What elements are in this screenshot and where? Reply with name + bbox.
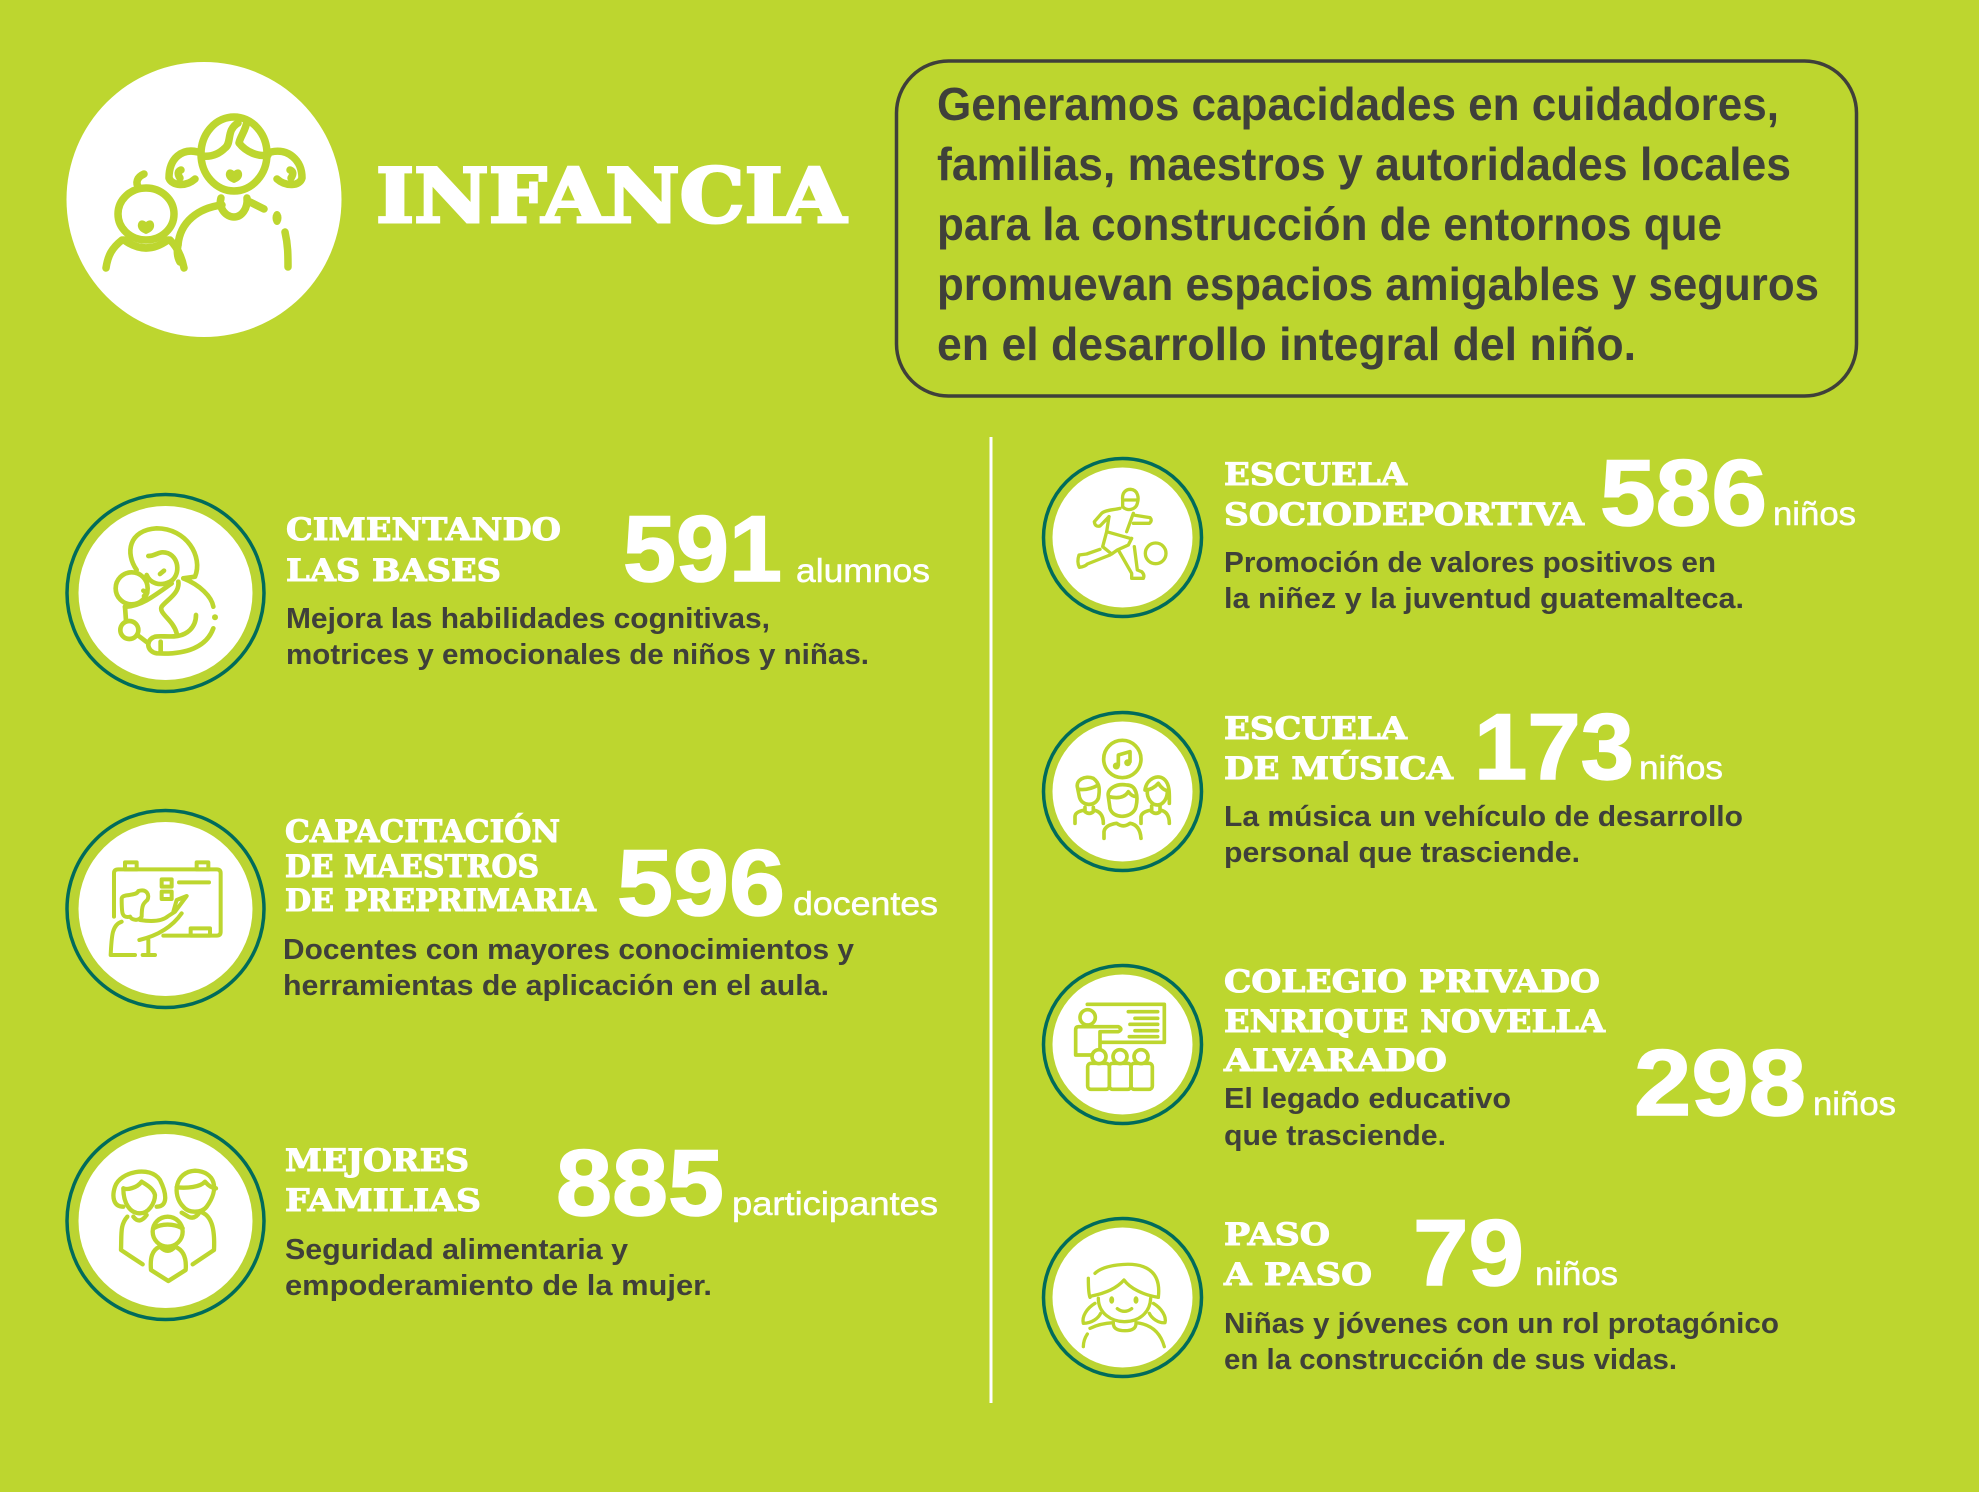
number: 885 participantes bbox=[556, 1130, 938, 1235]
description: Promoción de valores positivos en bbox=[1224, 547, 1716, 579]
callout: mission statement: familias, maestros y autoridades locales bbox=[937, 138, 1791, 190]
callout: mission statement: promuevan espacios amigables y seguros bbox=[937, 258, 1819, 310]
number: 298 niños: 298 bbox=[1634, 1030, 1806, 1135]
heading: FAMILIAS bbox=[285, 1183, 481, 1219]
description: motrices y emocionales de niños y niñas. bbox=[286, 639, 869, 671]
heading: MEJORES bbox=[285, 1143, 469, 1179]
number: 596 docentes: 596 bbox=[617, 830, 785, 935]
description: Mejora las habilidades cognitivas, bbox=[286, 603, 770, 635]
description: que trasciende. bbox=[1224, 1120, 1446, 1152]
number: 586 niños: 586 bbox=[1600, 440, 1767, 545]
column divider bbox=[990, 437, 992, 1403]
icon: children with music note bbox=[1044, 712, 1202, 870]
description bbox=[1224, 1308, 1779, 1376]
number: 591 alumnos bbox=[623, 496, 930, 601]
description bbox=[286, 603, 869, 671]
panel: mejores familias bbox=[67, 1122, 938, 1320]
callout: mission statement: para la construcción de entornos que bbox=[937, 198, 1722, 250]
heading: PASO bbox=[1224, 1217, 1330, 1253]
number: 885 participantes: 885 bbox=[556, 1130, 724, 1235]
heading bbox=[285, 1143, 481, 1219]
icon: girl with pigtails bbox=[1044, 1218, 1202, 1376]
heading bbox=[1223, 1217, 1372, 1293]
panel: colegio privado bbox=[1044, 964, 1896, 1152]
panel: escuela sociodeportiva bbox=[1044, 440, 1856, 616]
heading: LAS BASES bbox=[286, 553, 501, 589]
heading bbox=[285, 812, 597, 919]
heading: ESCUELA bbox=[1224, 711, 1408, 747]
number: 173 niños: niños bbox=[1639, 749, 1723, 786]
description: El legado educativo bbox=[1224, 1083, 1511, 1115]
icon: presenter and audience bbox=[1044, 966, 1202, 1124]
description bbox=[1224, 1083, 1511, 1152]
panel: cimentando las bases bbox=[67, 494, 930, 692]
number: 591 alumnos: 591 bbox=[623, 496, 782, 601]
description bbox=[1224, 547, 1744, 615]
number: 298 niños: niños bbox=[1813, 1085, 1896, 1122]
callout: mission statement: Generamos capacidades en cuidadores, bbox=[937, 78, 1779, 130]
heading: A PASO bbox=[1223, 1257, 1372, 1293]
panel: paso a paso bbox=[1044, 1200, 1779, 1376]
description: La música un vehículo de desarrollo bbox=[1224, 801, 1743, 833]
description: Docentes con mayores conocimientos y bbox=[283, 934, 854, 966]
description bbox=[285, 1234, 712, 1302]
heading: ESCUELA bbox=[1224, 457, 1408, 493]
panel: capacitación de maestros bbox=[67, 810, 938, 1008]
description bbox=[283, 934, 854, 1002]
heading: DE MÚSICA bbox=[1224, 749, 1454, 787]
heading bbox=[286, 512, 561, 589]
number: 298 niños bbox=[1634, 1030, 1896, 1135]
description: herramientas de aplicación en el aula. bbox=[283, 970, 829, 1002]
heading: CIMENTANDO bbox=[286, 512, 561, 548]
number: 591 alumnos: alumnos bbox=[796, 552, 930, 589]
description: en la construcción de sus vidas. bbox=[1224, 1344, 1677, 1376]
heading: COLEGIO PRIVADO bbox=[1224, 964, 1600, 1000]
description bbox=[1224, 801, 1743, 869]
callout: mission statement: en el desarrollo integral del niño. bbox=[937, 318, 1636, 370]
icon: family bbox=[67, 1122, 264, 1320]
number: 586 niños: niños bbox=[1773, 495, 1856, 532]
heading: ALVARADO bbox=[1223, 1043, 1447, 1079]
number: 79 niños: niños bbox=[1535, 1255, 1618, 1292]
title: INFANCIA bbox=[376, 152, 848, 240]
number: 596 docentes bbox=[617, 830, 938, 935]
header icon: mother and child in white circle bbox=[66, 62, 342, 337]
number: 885 participantes: participantes bbox=[732, 1185, 938, 1222]
number: 79 niños bbox=[1413, 1200, 1618, 1305]
description: Niñas y jóvenes con un rol protagónico bbox=[1224, 1308, 1779, 1340]
description: personal que trasciende. bbox=[1224, 837, 1580, 869]
number: 173 niños: 173 bbox=[1474, 694, 1634, 799]
heading bbox=[1224, 457, 1585, 533]
description: Seguridad alimentaria y bbox=[285, 1234, 628, 1266]
heading bbox=[1223, 964, 1606, 1079]
description: la niñez y la juventud guatemalteca. bbox=[1224, 583, 1744, 615]
callout: mission statement bbox=[896, 61, 1856, 396]
number: 596 docentes: docentes bbox=[793, 885, 938, 922]
icon: mother holding baby bbox=[67, 494, 264, 692]
heading: DE MAESTROS bbox=[285, 849, 539, 885]
heading bbox=[1224, 711, 1454, 787]
description: empoderamiento de la mujer. bbox=[285, 1270, 712, 1302]
number: 79 niños: 79 bbox=[1413, 1200, 1524, 1305]
heading: SOCIODEPORTIVA bbox=[1224, 497, 1585, 533]
number: 586 niños bbox=[1600, 440, 1856, 545]
icon: soccer player bbox=[1044, 458, 1202, 616]
icon: teacher at whiteboard bbox=[67, 810, 264, 1008]
heading: CAPACITACIÓN bbox=[285, 812, 560, 850]
panel: escuela de música bbox=[1044, 694, 1743, 870]
heading: DE PREPRIMARIA bbox=[285, 883, 597, 919]
number: 173 niños bbox=[1474, 694, 1723, 799]
heading: ENRIQUE NOVELLA bbox=[1224, 1004, 1606, 1040]
